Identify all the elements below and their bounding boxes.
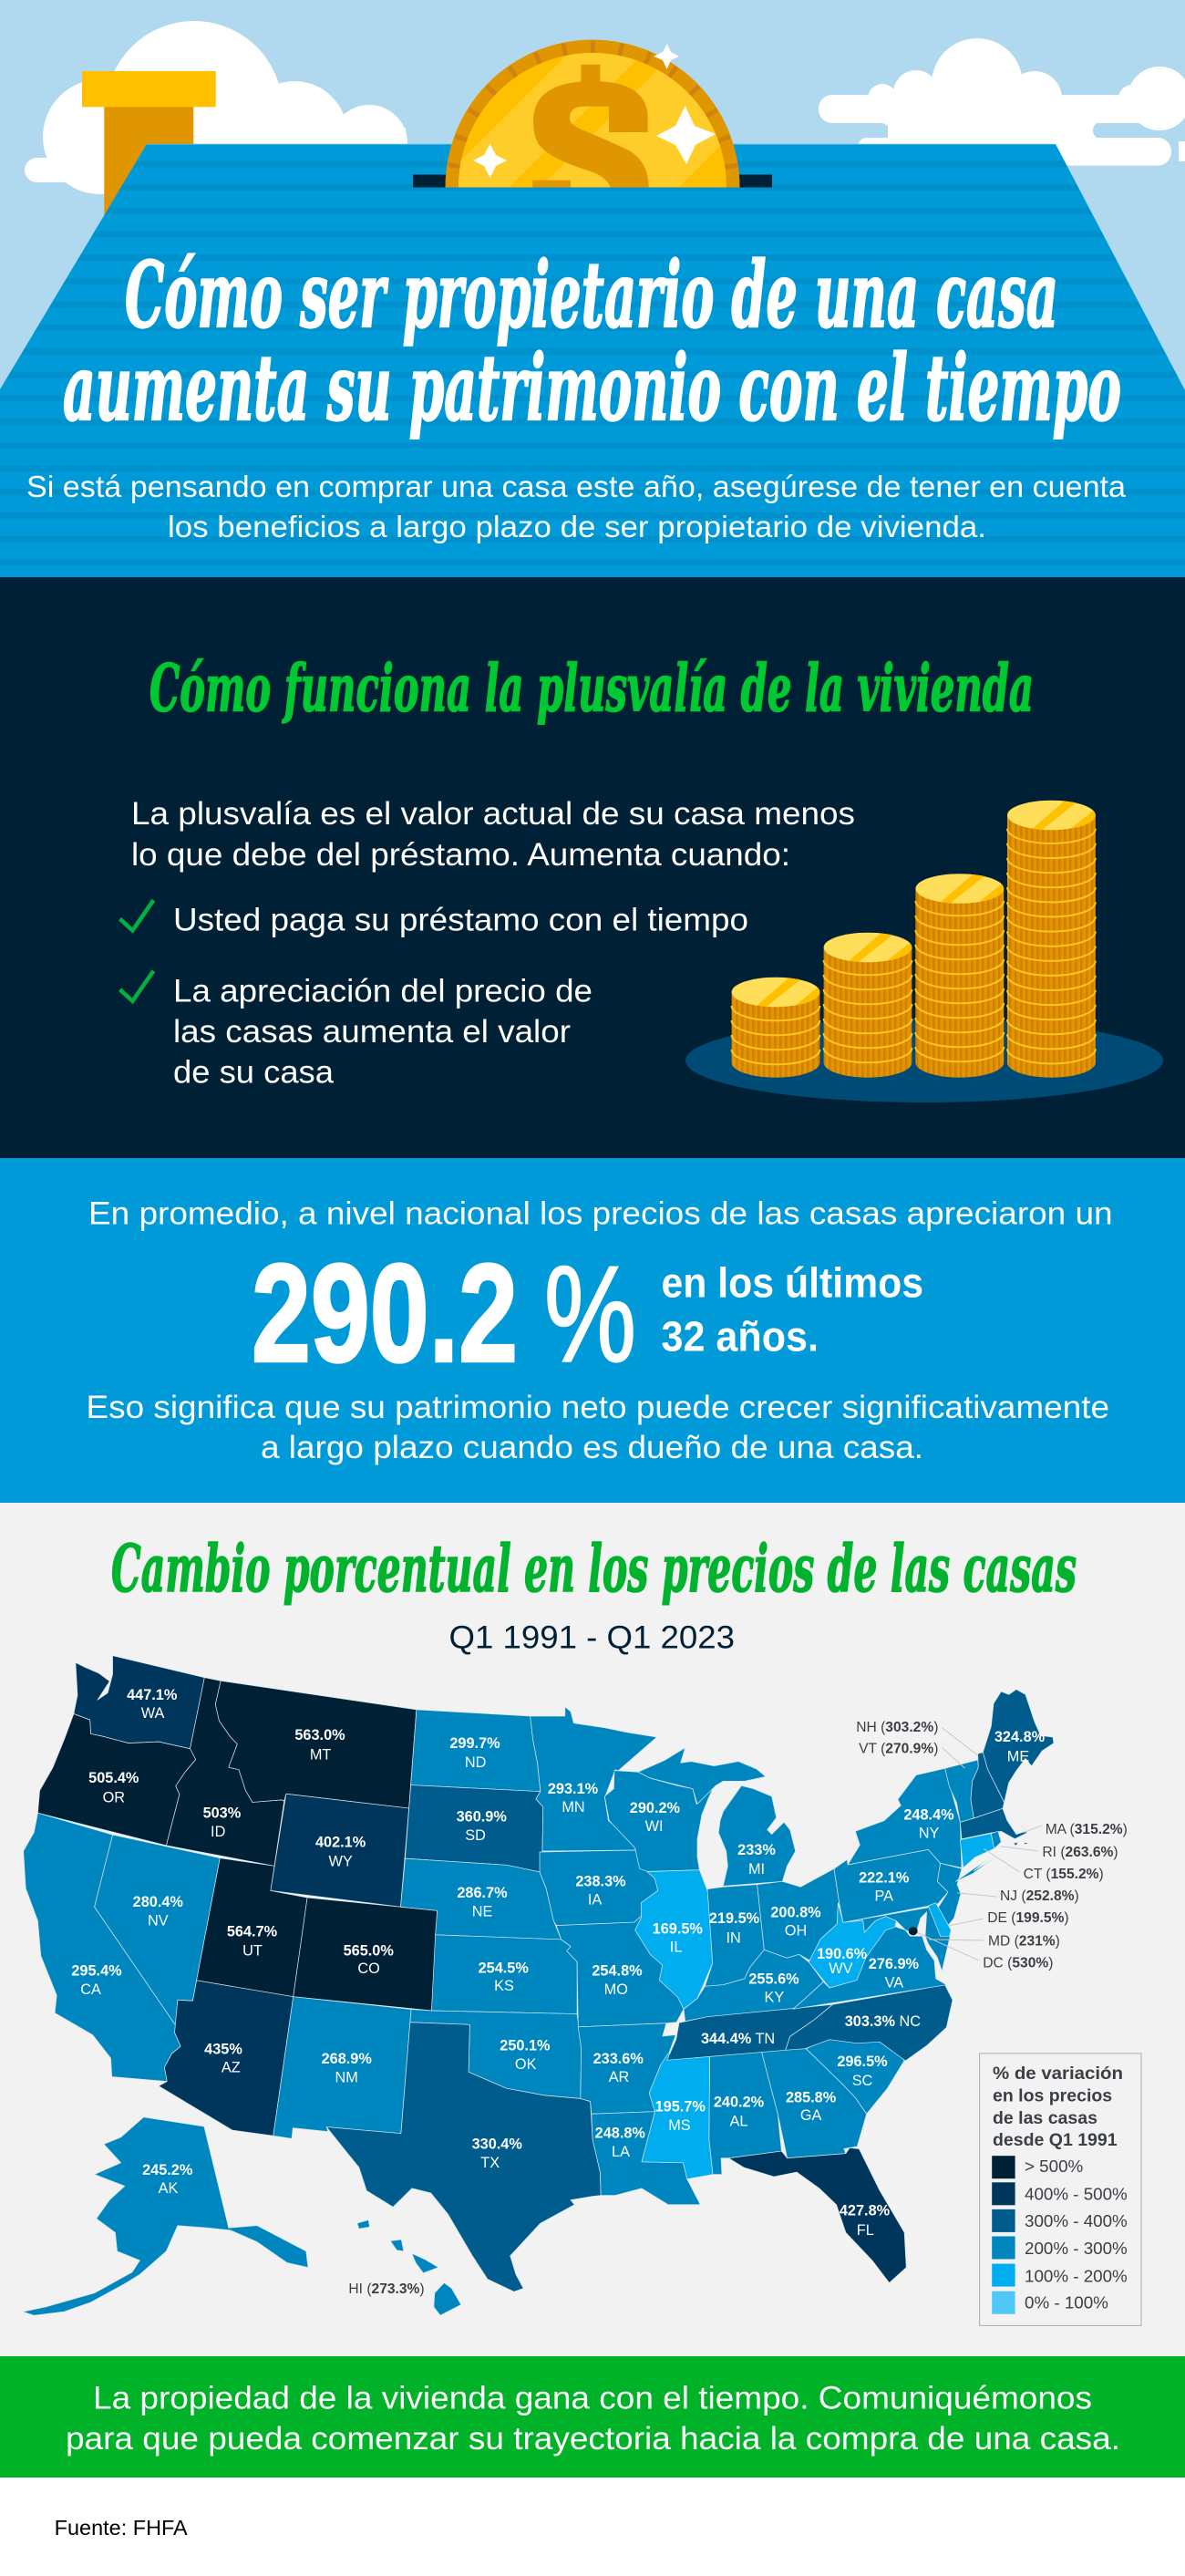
- southeastern states: [642, 2035, 906, 2282]
- state value labels: 169.5%: [653, 1920, 703, 1937]
- state value labels: 219.5%: [709, 1910, 760, 1927]
- state value labels: OH: [785, 1922, 807, 1939]
- state value labels: 565.0%: [344, 1942, 394, 1959]
- icon: sparkles: [473, 44, 716, 178]
- state value labels: SC: [852, 2073, 873, 2089]
- state value labels: IL: [670, 1940, 682, 1956]
- icon: check 2: [120, 971, 153, 1001]
- state value labels: NM: [335, 2070, 358, 2086]
- callout labels for small states: RI (263.6%): [1042, 1845, 1118, 1860]
- bullet 2: La apreciación del precio de: [173, 974, 592, 1009]
- state value labels: 254.5%: [479, 1960, 529, 1977]
- panel: call to action: [0, 2356, 1185, 2478]
- state value labels: 200.8%: [770, 1904, 821, 1920]
- text: net worth note: [86, 1390, 1109, 1465]
- state value labels: NV: [148, 1913, 169, 1929]
- state value labels: 233%: [737, 1842, 776, 1858]
- text: time span: en los últimos: [662, 1259, 923, 1307]
- state value labels: IA: [588, 1892, 602, 1909]
- state value labels: OK: [515, 2056, 537, 2073]
- state value labels: LA: [612, 2144, 630, 2160]
- text: time span: [662, 1259, 923, 1360]
- new england states: [945, 1690, 1054, 1881]
- bullet 2: [173, 974, 592, 1091]
- state value labels: 303.3% NC: [845, 2013, 921, 2030]
- state value labels: 240.2%: [714, 2095, 765, 2111]
- text: time span: 32 años.: [662, 1313, 819, 1360]
- callout leader lines: [909, 1728, 1042, 1960]
- state value labels: KS: [494, 1978, 514, 1994]
- state value labels: 293.1%: [548, 1781, 599, 1797]
- callout labels for small states: DE (199.5%): [987, 1910, 1069, 1926]
- text block: definition: [131, 796, 855, 873]
- state value labels: MO: [604, 1981, 628, 1998]
- illustration: coin stacks: [685, 800, 1163, 1102]
- state value labels: 299.7%: [449, 1735, 500, 1752]
- text: net worth note: a largo plazo cuando es dueño de una casa.: [261, 1430, 923, 1465]
- callout labels for small states: HI (273.3%): [348, 2281, 425, 2297]
- legend title: [993, 2064, 1123, 2150]
- state value labels: 195.7%: [655, 2099, 706, 2116]
- state value labels: 245.2%: [142, 2162, 193, 2178]
- legend title: desde Q1 1991: [993, 2130, 1118, 2150]
- state value labels: VA: [885, 1975, 903, 1991]
- callout labels for small states: [348, 1720, 1128, 2297]
- state value labels: 447.1%: [127, 1687, 178, 1703]
- call to action text: [66, 2381, 1120, 2457]
- text: intro line: En promedio, a nivel nacional los precios de las casas apreciaron un: [88, 1196, 1113, 1232]
- call to action text: La propiedad de la vivienda gana con el tiempo. Comuniquémonos: [93, 2381, 1092, 2416]
- legend title: de las casas: [993, 2108, 1097, 2128]
- legend title: en los precios: [993, 2086, 1112, 2106]
- state value labels: CA: [80, 1981, 101, 1998]
- state value labels: AK: [159, 2180, 178, 2197]
- state value labels: [71, 1687, 1046, 2239]
- title: [63, 243, 1121, 441]
- state value labels: 295.4%: [71, 1963, 122, 1980]
- state value labels: ME: [1007, 1749, 1029, 1765]
- state value labels: ID: [211, 1824, 225, 1840]
- state value labels: 286.7%: [457, 1885, 508, 1901]
- panel: como funciona la plusvalia: [0, 577, 1185, 1158]
- panel: national appreciation stat: [0, 1158, 1185, 1503]
- state value labels: NY: [919, 1826, 939, 1842]
- state value labels: 563.0%: [294, 1727, 345, 1743]
- state value labels: UT: [242, 1942, 263, 1959]
- callout labels for small states: MA (315.2%): [1046, 1822, 1128, 1837]
- callout labels for small states: DC (530%): [983, 1955, 1053, 1971]
- callout labels for small states: MD (231%): [988, 1934, 1060, 1950]
- state value labels: 360.9%: [457, 1808, 507, 1825]
- legend swatches: [992, 2156, 1015, 2314]
- state value labels: 564.7%: [227, 1923, 278, 1940]
- panel: map section: [0, 1503, 1185, 2356]
- state value labels: NE: [472, 1903, 492, 1919]
- state value labels: 233.6%: [593, 2051, 644, 2067]
- state value labels: 190.6%: [817, 1946, 868, 1962]
- subtitle: los beneficios a largo plazo de ser propietario de vivienda.: [168, 510, 986, 543]
- state value labels: 238.3%: [575, 1873, 626, 1889]
- state value labels: PA: [874, 1888, 893, 1905]
- state value labels: FL: [857, 2222, 874, 2239]
- state value labels: KY: [765, 1989, 784, 2005]
- legend labels: 0% - 100%: [1025, 2293, 1108, 2312]
- state value labels: 435%: [204, 2041, 242, 2057]
- text: net worth note: Eso significa que su patrimonio neto puede crecer significativamente: [86, 1390, 1109, 1425]
- state value labels: ND: [465, 1754, 486, 1771]
- legend labels: 400% - 500%: [1025, 2185, 1128, 2204]
- state value labels: 276.9%: [869, 1956, 920, 1972]
- text block: definition: La plusvalía es el valor actual de su casa menos: [131, 796, 855, 832]
- state value labels: SD: [465, 1827, 486, 1844]
- state value labels: 296.5%: [837, 2054, 888, 2070]
- state value labels: GA: [800, 2107, 821, 2124]
- coin slot: [413, 175, 772, 188]
- choropleth map of states: [23, 1656, 1054, 2315]
- callout labels for small states: NH (303.2%): [856, 1720, 938, 1735]
- state value labels: IN: [726, 1929, 741, 1946]
- icon: left cloud: [25, 21, 407, 198]
- state value labels: 250.1%: [500, 2037, 551, 2054]
- state value labels: AL: [730, 2114, 747, 2130]
- source note: Fuente: FHFA: [55, 2516, 188, 2540]
- callout labels for small states: CT (155.2%): [1024, 1867, 1104, 1882]
- subheading: period: Q1 1991 - Q1 2023: [448, 1620, 735, 1656]
- bullet 1: Usted paga su préstamo con el tiempo: [173, 902, 748, 937]
- state value labels: WV: [829, 1960, 853, 1977]
- state value labels: OR: [103, 1789, 125, 1805]
- great lakes and mid-atlantic states: [604, 1748, 962, 2061]
- bullet 2: de su casa: [173, 1055, 335, 1091]
- state value labels: MT: [310, 1747, 331, 1764]
- bullet 2: las casas aumenta el valor: [173, 1014, 571, 1050]
- legend labels: 100% - 200%: [1025, 2267, 1128, 2285]
- state value labels: WA: [141, 1705, 164, 1722]
- state value labels: 344.4% TN: [701, 2031, 775, 2047]
- state value labels: 248.4%: [903, 1806, 954, 1823]
- state value labels: 255.6%: [748, 1971, 799, 1987]
- state value labels: 324.8%: [994, 1729, 1046, 1745]
- legend title: % de variación: [993, 2064, 1123, 2084]
- legend labels: > 500%: [1025, 2157, 1084, 2176]
- big number: %: [544, 1237, 636, 1391]
- icon: gold dollar coin: [445, 40, 740, 188]
- state value labels: 254.8%: [592, 1963, 643, 1980]
- legend: [980, 2054, 1141, 2325]
- call to action text: para que pueda comenzar su trayectoria hacia la compra de una casa.: [66, 2421, 1120, 2457]
- state value labels: 285.8%: [786, 2090, 837, 2106]
- state value labels: WY: [328, 1853, 353, 1869]
- legend labels: 300% - 400%: [1025, 2211, 1128, 2230]
- state value labels: 427.8%: [840, 2203, 891, 2219]
- subtitle: [26, 470, 1127, 543]
- state value labels: TX: [480, 2155, 500, 2171]
- header sky background: [0, 0, 1185, 577]
- state value labels: MN: [562, 1799, 585, 1816]
- subtitle: Si está pensando en comprar una casa este año, asegúrese de tener en cuenta: [26, 470, 1127, 503]
- legend labels: 200% - 300%: [1025, 2239, 1128, 2258]
- state value labels: WI: [645, 1818, 664, 1835]
- state value labels: 268.9%: [322, 2051, 372, 2067]
- legend labels: [1025, 2157, 1128, 2312]
- state value labels: CO: [357, 1960, 380, 1977]
- state value labels: MI: [748, 1861, 765, 1878]
- state value labels: 330.4%: [472, 2136, 522, 2152]
- state value labels: 248.8%: [595, 2125, 645, 2141]
- text block: definition: lo que debe del préstamo. Aumenta cuando:: [131, 837, 790, 873]
- state value labels: 290.2%: [630, 1800, 681, 1816]
- state value labels: 505.4%: [88, 1770, 139, 1786]
- callout labels for small states: VT (270.9%): [859, 1741, 938, 1756]
- icon: check 1: [120, 900, 153, 930]
- state value labels: 503%: [203, 1805, 242, 1821]
- state value labels: 222.1%: [859, 1870, 910, 1887]
- icon: chimney: [82, 71, 216, 219]
- big number: 290.2: [252, 1236, 518, 1391]
- callout labels for small states: NJ (252.8%): [1000, 1888, 1079, 1904]
- state value labels: 402.1%: [315, 1834, 366, 1850]
- roof with stripes: [0, 144, 1185, 577]
- icon: right cloud: [819, 38, 1185, 166]
- state value labels: AZ: [222, 2059, 241, 2075]
- state value labels: MS: [668, 2117, 691, 2134]
- state value labels: AR: [609, 2069, 629, 2085]
- state value labels: 280.4%: [133, 1894, 183, 1910]
